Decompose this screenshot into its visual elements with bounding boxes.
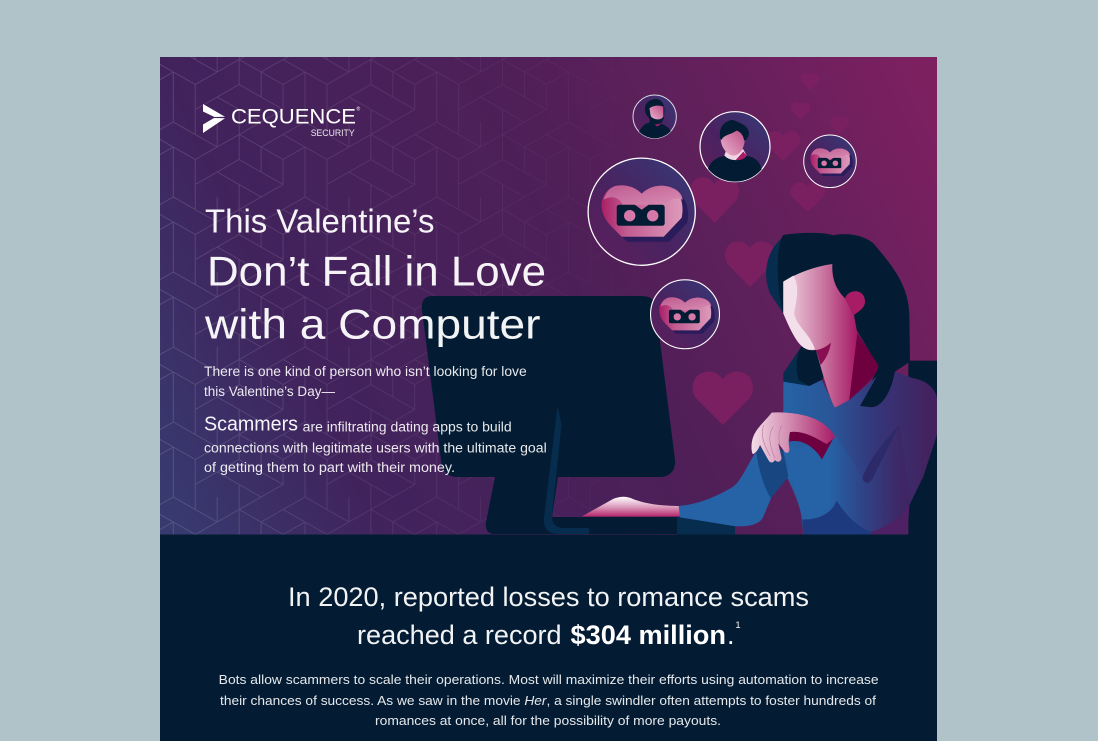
logo: Cequence Security bbox=[203, 104, 360, 138]
torso right lower shade bbox=[870, 505, 909, 535]
neck shadow bbox=[849, 333, 878, 400]
scammers text bbox=[204, 413, 547, 475]
icon: logo chevron bbox=[203, 104, 225, 133]
statistic heading bbox=[288, 582, 809, 650]
hair back lighter bbox=[766, 235, 810, 387]
scammers line 1: are infiltrating dating apps to build bbox=[303, 420, 512, 435]
paragraph line 3: romances at once, all for the possibility of more payouts. bbox=[375, 713, 721, 728]
logo wordmark: CEQUENCE bbox=[231, 106, 356, 128]
monitor stand highlight bbox=[544, 406, 589, 534]
icon: man bubble bbox=[700, 112, 770, 183]
hand bbox=[751, 412, 835, 462]
intro line 2: this Valentine’s Day— bbox=[204, 384, 335, 399]
intro text bbox=[204, 364, 527, 399]
heading line 1: In 2020, reported losses to romance scams bbox=[288, 582, 809, 612]
torso bbox=[783, 372, 937, 535]
logo registered mark: ® bbox=[356, 106, 360, 112]
title line 2: Don’t Fall in Love bbox=[207, 248, 546, 294]
title line 3: with a Computer bbox=[204, 300, 541, 348]
arm inner shade bbox=[756, 447, 788, 498]
hero gradient background bbox=[160, 57, 937, 535]
mouse mound bbox=[582, 497, 683, 516]
front forearm bbox=[784, 434, 904, 520]
dark corner behind woman bbox=[908, 361, 938, 536]
paragraph line 1: Bots allow scammers to scale their operations. Most will maximize their efforts using automation to increase bbox=[219, 672, 879, 687]
statistic value: $304 million bbox=[570, 620, 726, 650]
hand under shadow bbox=[789, 430, 834, 459]
heading line 2: reached a record bbox=[357, 620, 562, 650]
ear bbox=[845, 291, 865, 315]
finger lines bbox=[762, 425, 782, 458]
woman at the computer bbox=[679, 233, 938, 536]
icon: floating hearts bbox=[690, 73, 849, 425]
scammers line 2: connections with legitimate users with the ultimate goal bbox=[204, 441, 547, 456]
bot bubble middle bbox=[651, 280, 719, 349]
lower torso shade bbox=[802, 501, 872, 535]
title bbox=[204, 204, 546, 348]
neck and face bbox=[783, 264, 857, 408]
hair bbox=[778, 233, 910, 407]
paragraph line 2: their chances of success. As we saw in the movie Her, a single swindler often attempts to foster hundreds of bbox=[220, 693, 876, 708]
scammers word: Scammers bbox=[204, 413, 298, 436]
footnote marker: 1 bbox=[736, 620, 741, 630]
desk front panel bbox=[677, 517, 735, 534]
arm on desk bbox=[678, 453, 772, 526]
period: . bbox=[727, 620, 735, 650]
statistic paragraph bbox=[219, 672, 879, 728]
monitor stand and desk bbox=[486, 477, 677, 534]
icon: man with beard bubble bbox=[633, 95, 676, 140]
icon: bot bubble small right bbox=[804, 135, 856, 188]
panel: statistic bbox=[160, 534, 937, 741]
icon: bot bubble large bbox=[588, 158, 695, 265]
intro line 1: There is one kind of person who isn’t looking for love bbox=[204, 364, 527, 379]
face highlight bbox=[783, 276, 815, 350]
sleeve fold bbox=[862, 423, 900, 483]
monitor bbox=[422, 296, 677, 534]
logo subtitle: SECURITY bbox=[311, 128, 355, 138]
monitor screen bbox=[422, 296, 675, 477]
chin shadow bbox=[816, 343, 831, 365]
title line 1: This Valentine’s bbox=[205, 204, 434, 240]
panel: hero bbox=[160, 57, 938, 536]
scammers line 3: of getting them to part with their money. bbox=[204, 460, 455, 475]
